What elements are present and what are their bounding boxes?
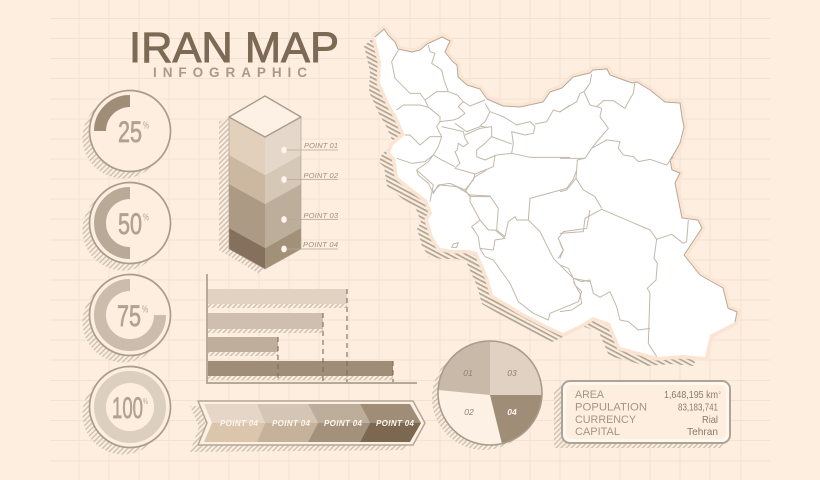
donut stat: 50% xyxy=(82,182,170,270)
value: 50 xyxy=(118,208,142,241)
top face xyxy=(229,96,301,137)
isometric stacked column xyxy=(219,96,339,273)
heading: Iran Map: IRAN MAP xyxy=(129,24,339,72)
box inner xyxy=(566,385,726,439)
value: 75 xyxy=(117,300,141,333)
point 03 marker and label xyxy=(281,211,339,223)
country facts box xyxy=(554,381,730,448)
percent sign: % xyxy=(143,120,149,132)
point 04 marker and label: POINT 04 xyxy=(303,240,338,249)
arc xyxy=(100,101,130,131)
slice 04 xyxy=(490,395,542,444)
fact labels: POPULATION xyxy=(575,402,647,414)
horizontal bar chart xyxy=(207,274,417,383)
shadow xyxy=(82,98,164,178)
title xyxy=(129,24,339,80)
slice 03 xyxy=(490,341,542,395)
shadow xyxy=(82,190,164,270)
pie labels: 02 xyxy=(464,407,474,417)
banner shadow xyxy=(190,406,417,452)
arc xyxy=(100,193,130,253)
fact values xyxy=(664,389,722,438)
segment 3 xyxy=(308,404,370,442)
segment labels xyxy=(220,419,415,428)
column outline xyxy=(229,117,301,269)
ring xyxy=(100,377,160,437)
bar 4 xyxy=(208,361,393,376)
fact values: 2 xyxy=(718,390,722,395)
shadow xyxy=(82,282,164,362)
donut stat: 25% xyxy=(82,90,170,178)
circle xyxy=(90,274,170,356)
point 03 marker and label: POINT 03 xyxy=(304,211,339,220)
left faces xyxy=(229,117,265,269)
map land xyxy=(375,29,737,357)
north and east coastline xyxy=(375,29,737,322)
chevron banner xyxy=(190,401,425,452)
segment 2 xyxy=(257,404,318,442)
bar 1 xyxy=(208,289,347,304)
slice 01 xyxy=(438,341,490,395)
shadow xyxy=(82,374,164,454)
segment 1 xyxy=(204,404,265,442)
percent sign: % xyxy=(143,212,149,224)
fact values: Rial xyxy=(702,414,718,426)
segment labels: POINT 04 xyxy=(376,419,415,428)
circle xyxy=(90,366,170,448)
pie outline xyxy=(438,341,542,445)
segment 4 xyxy=(360,404,421,442)
circle xyxy=(90,90,170,172)
point 01 marker and label: POINT 01 xyxy=(304,141,338,150)
value: 100 xyxy=(112,392,143,425)
point 02 marker and label xyxy=(281,171,339,183)
box frame xyxy=(562,381,730,443)
percent sign: % xyxy=(143,397,148,406)
axes xyxy=(207,274,417,383)
point 04 marker and label xyxy=(281,240,338,252)
fact labels: AREA xyxy=(575,389,605,401)
pie base xyxy=(438,341,542,445)
fact values: 1,648,195 km xyxy=(664,389,718,401)
bar hatches xyxy=(208,304,393,380)
donut stat: 75% xyxy=(82,274,170,362)
segment labels: POINT 04 xyxy=(272,419,311,428)
point 02 marker and label: POINT 02 xyxy=(304,171,339,180)
map halo xyxy=(375,29,737,357)
column shadow xyxy=(219,117,265,273)
pie labels: 01 xyxy=(463,368,473,378)
pie labels: 03 xyxy=(507,368,517,378)
pie chart xyxy=(432,341,542,450)
pie shadow xyxy=(432,346,536,450)
point 01 marker and label xyxy=(281,141,338,153)
donut stat: 100% xyxy=(82,366,170,454)
dashed guides xyxy=(278,289,393,383)
map hatched shadow xyxy=(364,38,726,366)
province borders xyxy=(392,45,688,357)
fact values: 83,183,741 xyxy=(678,402,718,414)
value: 25 xyxy=(118,116,142,149)
bar 3 xyxy=(208,337,278,352)
pie labels xyxy=(463,368,517,417)
subheading: Infographic: INFOGRAPHIC xyxy=(153,65,307,80)
fact labels: CAPITAL xyxy=(575,426,620,438)
pie labels: 04 xyxy=(507,407,517,417)
map of Iran xyxy=(364,29,737,366)
segment labels: POINT 04 xyxy=(220,419,259,428)
fact values: Tehran xyxy=(687,426,718,438)
fact labels: CURRENCY xyxy=(575,414,637,426)
segment labels: POINT 04 xyxy=(324,419,363,428)
circle xyxy=(90,182,170,264)
percent sign: % xyxy=(142,304,148,316)
right faces xyxy=(265,117,301,269)
fact labels xyxy=(575,389,647,438)
banner outline xyxy=(198,401,425,445)
arc xyxy=(100,285,160,345)
bar 2 xyxy=(208,313,323,329)
box shadow xyxy=(554,385,727,448)
